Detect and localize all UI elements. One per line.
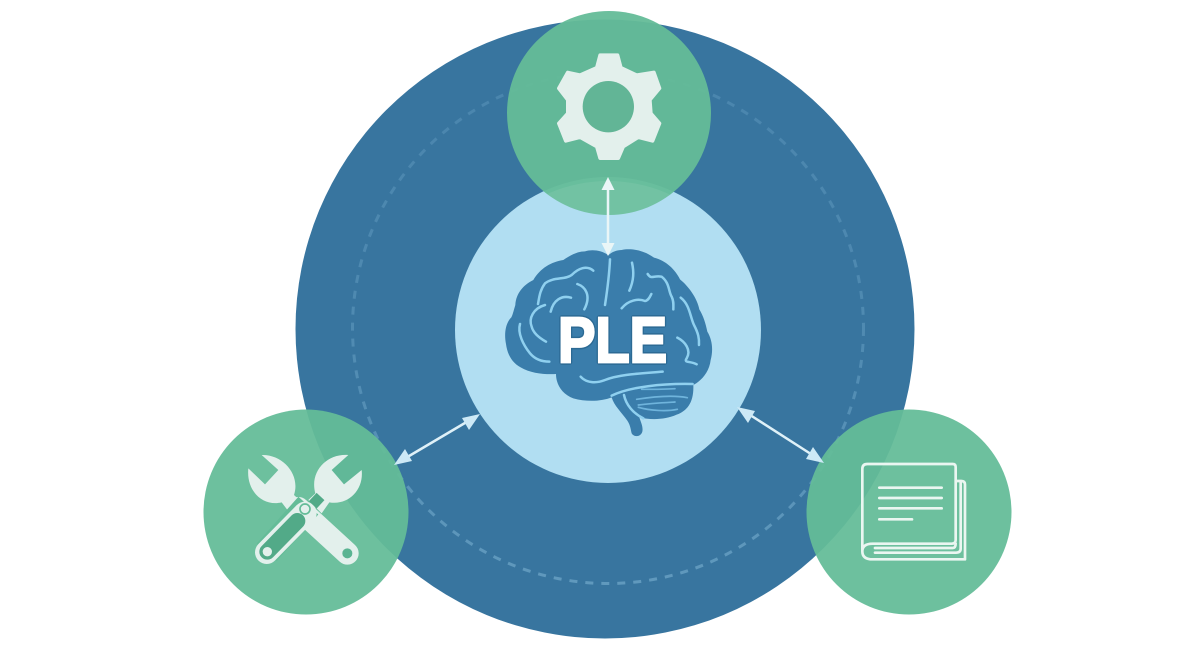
satellite circle: left	[204, 410, 408, 614]
icon: gear	[559, 55, 660, 158]
overlap highlight: top satellite over center	[548, 181, 670, 215]
outer blue circle	[296, 20, 914, 638]
icon: brain with PLE label	[505, 249, 712, 436]
PLE text: PLE	[558, 304, 667, 376]
icon: book with text lines	[862, 464, 965, 559]
PLE text: PLE	[558, 304, 667, 376]
arrow: top satellite to center	[602, 177, 614, 256]
satellite circle: top	[507, 11, 711, 215]
brain folds	[519, 259, 699, 418]
arrow: left satellite to center	[394, 414, 480, 465]
icon: crossed wrenches	[248, 455, 362, 558]
wrench: handle to lower left	[263, 455, 362, 556]
central light blue circle	[455, 177, 761, 483]
diagram: PLE hub and three satellites	[204, 11, 1012, 638]
brain silhouette	[505, 249, 712, 436]
wrench: handle to lower right	[248, 455, 352, 558]
satellite circle: right	[806, 410, 1012, 614]
dashed orbit ring	[352, 72, 864, 584]
arrow: right satellite to center	[737, 407, 824, 463]
